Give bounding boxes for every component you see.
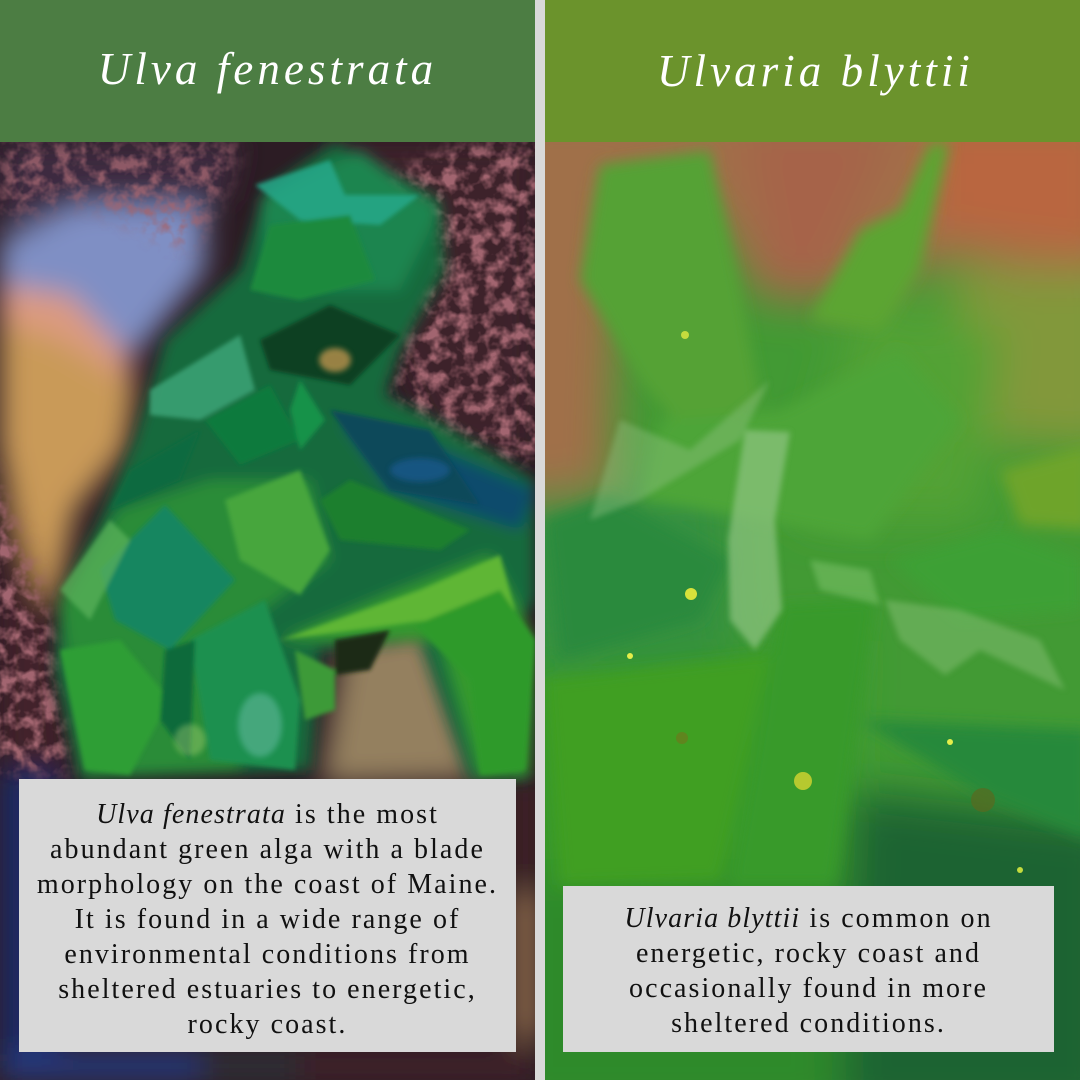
text block: Ulva fenestrata description: sheltered estuaries to energetic,: [58, 974, 477, 1005]
text block: Ulva fenestrata description: rocky coast.: [188, 1009, 347, 1040]
text block: Ulvaria blyttii description: Ulvaria blyttii is common on: [624, 903, 993, 934]
heading bar: Ulvaria blyttii: [545, 0, 1080, 142]
text block: Ulvaria blyttii description: occasionally found in more: [629, 973, 988, 1004]
panel: Ulvaria blyttii: [545, 0, 1080, 1080]
panel: Ulva fenestrata: [0, 0, 535, 1080]
blade mass: [55, 142, 535, 780]
text block: Ulva fenestrata description: It is found in a wide range of: [75, 904, 460, 935]
text block: Ulva fenestrata description: [19, 779, 516, 1052]
heading bar: Ulva fenestrata: [0, 0, 535, 142]
text block: Ulva fenestrata description: environmental conditions from: [64, 939, 471, 970]
text block: Ulvaria blyttii description: [563, 886, 1054, 1052]
text block: Ulva fenestrata description: Ulva fenestrata is the most: [96, 799, 439, 830]
photo: Ulvaria blyttii underwater: [545, 142, 1080, 1080]
photo: Ulva fenestrata on rocks: [0, 142, 535, 1080]
heading bar: Ulva fenestrata: Ulva fenestrata: [98, 44, 437, 94]
text block: Ulva fenestrata description: abundant green alga with a blade: [50, 834, 485, 865]
text block: Ulva fenestrata description: morphology on the coast of Maine.: [37, 869, 498, 900]
text block: Ulvaria blyttii description: sheltered conditions.: [671, 1008, 946, 1039]
text block: Ulvaria blyttii description: energetic, rocky coast and: [636, 938, 981, 969]
heading bar: Ulvaria blyttii: Ulvaria blyttii: [657, 46, 974, 96]
